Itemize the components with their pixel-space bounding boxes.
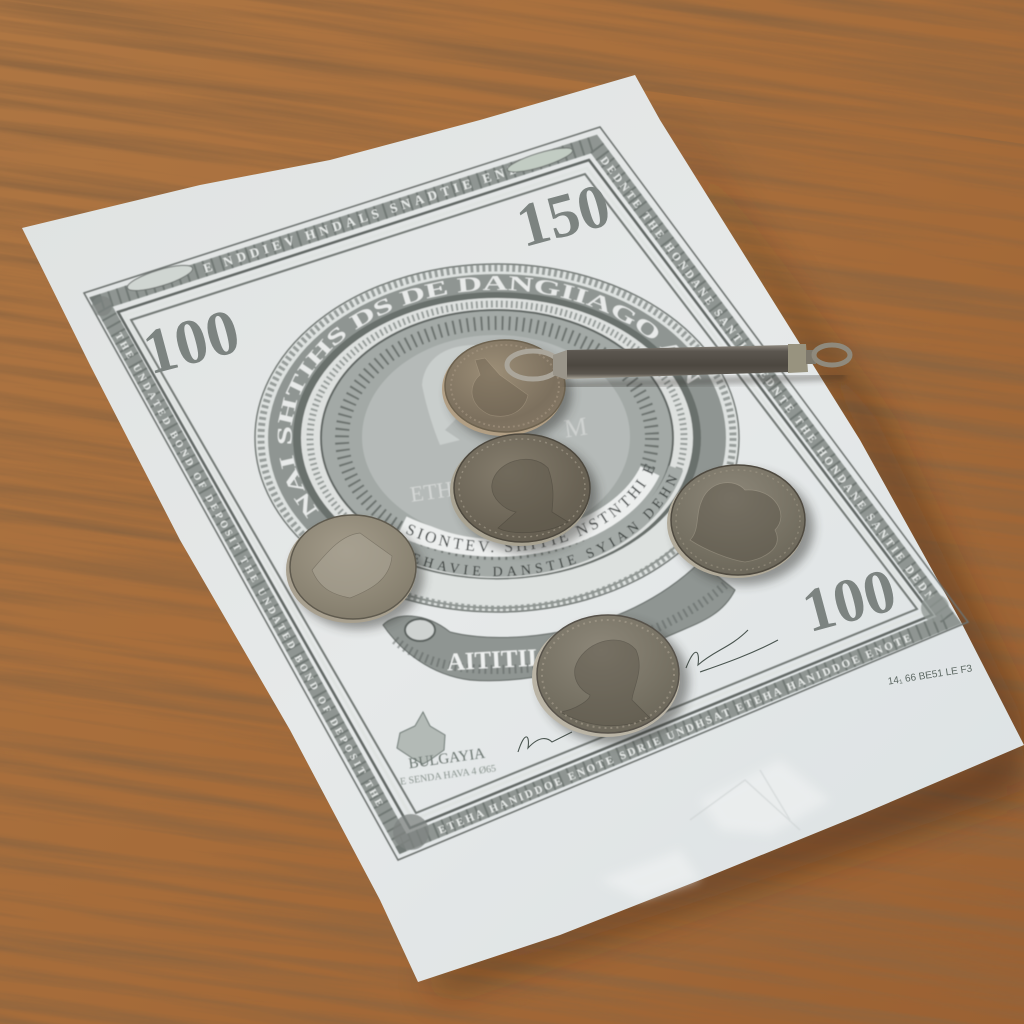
coin: bottom xyxy=(532,615,680,737)
banknote border xyxy=(82,126,970,862)
banknote border: DEDNTE THE HONDANE SANTIE DEDNTE THE HONDANE SANTIE DEDN xyxy=(600,156,934,600)
denomination: 150 top right: 150 xyxy=(510,171,617,261)
signatures xyxy=(518,630,778,752)
inner portrait disc: M xyxy=(562,412,589,443)
banknote border: E NDDIEV HNDALS SNADTIE ENDDIEV xyxy=(202,166,516,274)
banknote border: THE UNDATED BOND OF DEPOSIT THE UNDATED BOND OF DEPOSIT THE xyxy=(116,332,384,807)
crest and bottom-left caption xyxy=(397,712,497,788)
inner portrait disc: ETHE xyxy=(409,474,468,507)
central engraved rosette: AITITII xyxy=(446,645,538,676)
denomination: 100 bottom right: 100 xyxy=(796,556,903,646)
crest and bottom-left caption: BULGAYIA xyxy=(408,746,486,772)
banknote border: ETEHA HANIDDOE ENOTE SDRIE UNDHSAT ETEHA HANIDDOE ENOTE xyxy=(437,634,912,834)
coin: left xyxy=(286,515,416,623)
metal key tool xyxy=(507,344,850,386)
coin: right xyxy=(667,465,805,578)
denomination: 100 top left: 100 xyxy=(136,295,247,388)
coin shadows xyxy=(292,346,814,744)
central engraved rosette: NAI SHTIHS DS DE DANGIIAGO AN xyxy=(277,275,702,519)
shadow under paper xyxy=(430,95,1024,992)
coin: centre portrait xyxy=(450,434,590,546)
central engraved rosette xyxy=(254,262,740,682)
coin: top under key xyxy=(442,340,565,436)
inner portrait disc xyxy=(362,335,630,539)
serial text: 14₁ 66 BE51 LE F3 xyxy=(887,663,973,688)
central engraved rosette: DEHAVIE DANSTIE SYIAN DEHN xyxy=(414,474,678,577)
central engraved rosette: SIONTEV. SHITIE NSTNTHI E xyxy=(406,464,656,553)
crest and bottom-left caption: E SENDA HAVA 4 Ø65 xyxy=(399,763,497,788)
